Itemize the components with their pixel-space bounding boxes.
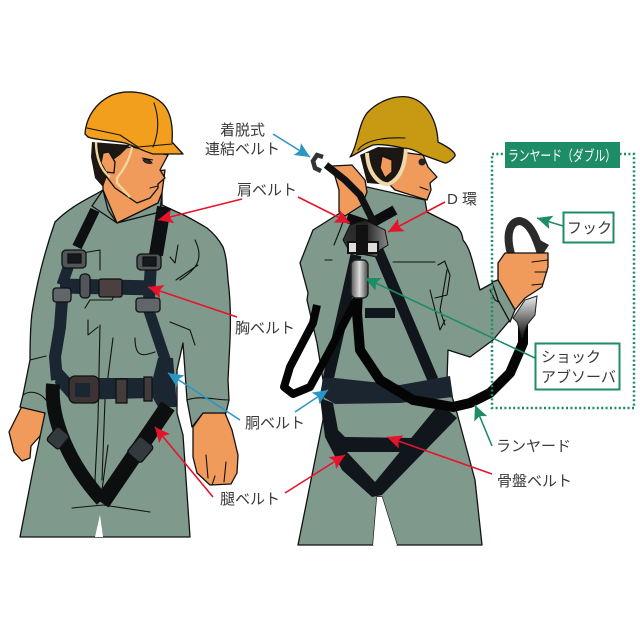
arrow: lanyard — [475, 405, 492, 446]
lanyard hook — [509, 221, 541, 254]
hair — [91, 142, 130, 187]
label: detachable connecting belt: 着脱式 — [220, 122, 265, 139]
label: pelvic belt: 骨盤ベルト — [497, 473, 572, 490]
raised hand — [332, 165, 367, 216]
arrow: leg belt front — [155, 427, 213, 497]
jacket fold lines — [325, 222, 513, 330]
arrow: connecting belt — [273, 134, 310, 157]
arrow: waist belt back — [295, 390, 328, 412]
lanyard heading — [505, 142, 620, 168]
eye — [418, 158, 426, 166]
jacket and trousers — [20, 190, 230, 537]
shock absorber — [351, 260, 368, 298]
arrow: leg belt back — [285, 455, 345, 493]
callout: hook — [564, 212, 614, 242]
eye — [142, 158, 153, 163]
arrow: chest belt — [148, 287, 237, 317]
dotted lanyard frame — [492, 154, 634, 408]
head — [103, 147, 168, 203]
leg belt — [53, 384, 102, 500]
arrow: hook — [537, 218, 563, 226]
arrow: pelvic belt — [387, 437, 492, 474]
hair — [360, 147, 405, 185]
collar — [92, 190, 162, 223]
waist belt back — [320, 376, 453, 404]
arrow: D ring — [388, 202, 445, 232]
ear and strap — [367, 148, 406, 184]
hand holding hook — [498, 253, 548, 310]
pelvic belt — [320, 398, 457, 497]
trousers and jacket — [298, 187, 513, 545]
harness buckles — [46, 250, 161, 463]
worker front view — [9, 92, 238, 537]
right hand — [193, 413, 238, 485]
sleeve cuff — [492, 280, 515, 322]
callout: hook: フック — [567, 220, 612, 237]
chest belt — [60, 286, 155, 288]
label: chest belt: 胸ベルト — [235, 320, 295, 337]
back straps — [328, 255, 356, 380]
label: D ring: D 環 — [447, 191, 477, 208]
label: waist belt: 胴ベルト — [245, 415, 305, 432]
callout: shock absorber: アブソーバ — [541, 368, 616, 386]
neck — [103, 170, 165, 223]
arrow: shock absorber — [365, 278, 535, 358]
arrow: shoulder belt back — [298, 197, 350, 223]
label: detachable connecting belt — [205, 122, 280, 158]
lanyard — [357, 290, 523, 407]
lower front straps — [55, 300, 62, 380]
jacket fold lines — [23, 240, 229, 512]
arrow: waist belt front — [168, 373, 240, 420]
left hand — [9, 406, 46, 461]
arrow: shoulder belt front — [158, 199, 242, 220]
helmet orange — [85, 92, 183, 154]
label: leg belt: 腿ベルト — [220, 491, 280, 508]
connecting belt hook — [313, 155, 323, 171]
lanyard absorber — [513, 296, 537, 337]
front shoulder straps — [77, 210, 95, 247]
neck and face — [385, 150, 437, 200]
callout: shock absorber — [536, 344, 620, 390]
callout: shock absorber: ショック — [541, 349, 601, 366]
waist belt — [55, 358, 177, 407]
label: shoulder belt: 肩ベルト — [237, 182, 297, 199]
worker back view — [284, 97, 549, 545]
label: lanyard: ランヤード — [496, 438, 571, 455]
label: detachable connecting belt: 連結ベルト — [205, 141, 280, 158]
d-ring assembly — [343, 220, 388, 257]
ear and chin strap — [101, 152, 115, 173]
helmet gold — [350, 97, 455, 163]
